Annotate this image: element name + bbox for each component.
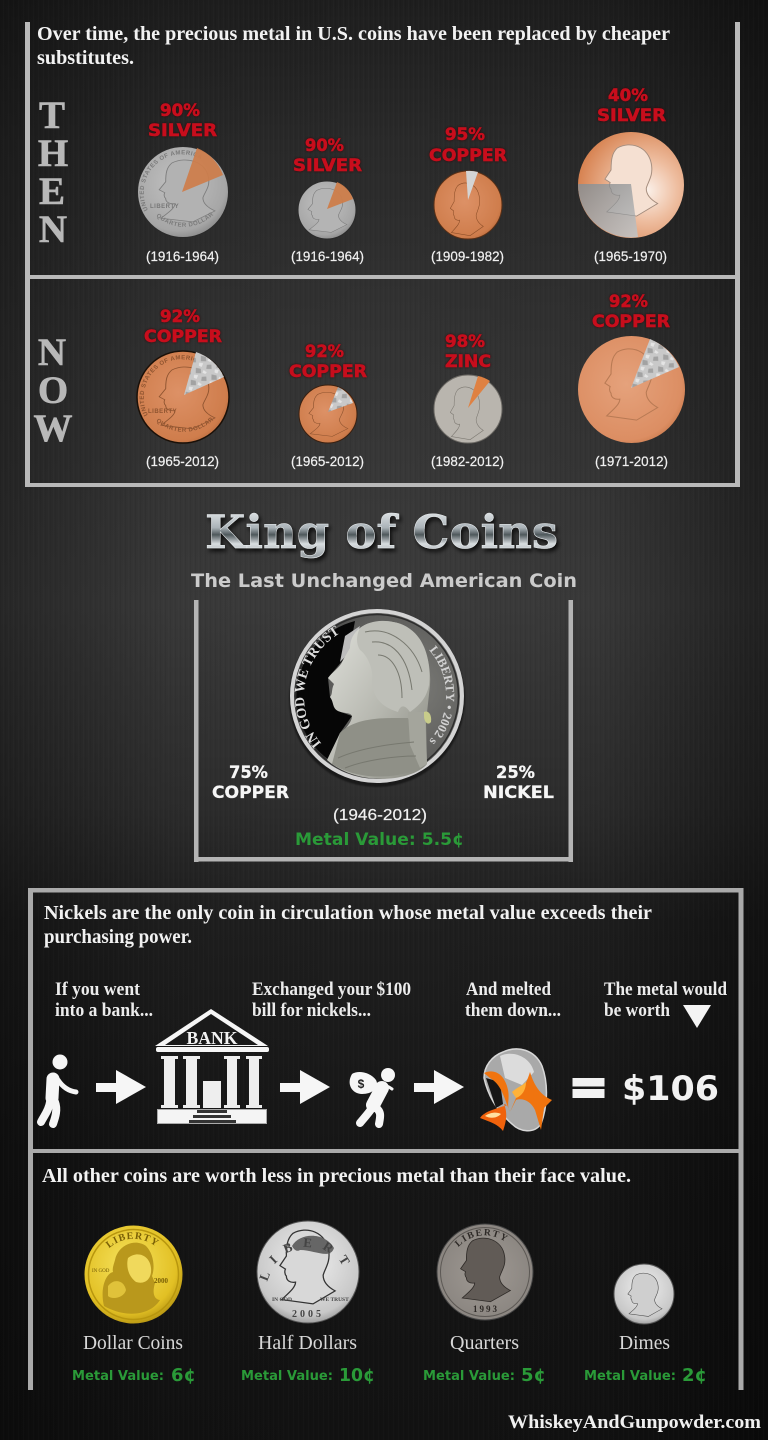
- coin: then half dollar 40% silver: (1965-1970): [594, 248, 667, 264]
- label: dollar coins: Dollar Coins: [83, 1333, 183, 1354]
- icon: walking person: [41, 1054, 76, 1124]
- coin: then half dollar 40% silver: 40%: [608, 86, 648, 106]
- metal value: nickel: Metal Value: 5.5¢: [295, 830, 464, 850]
- coin: now half dollar 92% copper: 92%: [609, 292, 648, 312]
- metal value: dollar: 6¢: [171, 1365, 196, 1386]
- coin: dollar: 2000: [154, 1277, 168, 1285]
- coin: now quarter 92% copper: 92%: [160, 307, 200, 327]
- metal value: half dollar: [241, 1365, 375, 1386]
- coin: half dollar: IN GOD: [272, 1297, 292, 1303]
- label: dimes: Dimes: [619, 1333, 670, 1354]
- label: NOW: N: [38, 331, 66, 374]
- metal value: quarter: 5¢: [521, 1365, 546, 1386]
- coin: then half dollar 40% silver: SILVER: [597, 106, 666, 126]
- step text: melt: And melted: [466, 980, 552, 1000]
- value: $106: $106: [622, 1069, 719, 1109]
- panel: melt value frame: [28, 888, 744, 1390]
- coin: then penny 95% copper: COPPER: [429, 146, 507, 166]
- coin: dime: [614, 1264, 674, 1324]
- coin: then penny 95% copper: 95%: [445, 125, 485, 145]
- coin: quarter: [436, 1224, 534, 1320]
- label: 75% copper: [212, 763, 289, 803]
- step text: bank: into a bank...: [55, 1001, 153, 1021]
- coin: then dime 90% silver: [291, 136, 364, 264]
- label: NOW: [34, 331, 72, 450]
- icon: equals sign: [572, 1078, 604, 1098]
- footer: source: WhiskeyAndGunpowder.com: [508, 1412, 761, 1433]
- coin: now dime 92% copper: 92%: [305, 342, 344, 362]
- metal value: dime: 2¢: [682, 1365, 707, 1386]
- coin: then dime 90% silver: SILVER: [293, 156, 362, 176]
- coin: dollar: LIBERTY: [105, 1232, 160, 1248]
- heading: precious metal statement: Over time, the precious metal in U.S. coins have been replaced by cheaper: [37, 24, 670, 45]
- step text: melt: them down...: [465, 1001, 561, 1021]
- coin: now quarter 92% copper: QUARTER DOLLAR: [157, 418, 214, 432]
- coin: then half dollar 40% silver: [578, 86, 684, 264]
- step text: bank: [55, 980, 153, 1021]
- coin: now quarter 92% copper: (1965-2012): [146, 453, 219, 469]
- icon: down triangle: [683, 1005, 711, 1028]
- label: THEN: E: [39, 170, 65, 213]
- coin: then quarter 90% silver: (1916-1964): [146, 248, 219, 264]
- coin: now penny 98% zinc: (1982-2012): [431, 453, 504, 469]
- step text: worth: The metal would: [604, 980, 728, 1000]
- coin: half dollar: [256, 1220, 360, 1324]
- label: 25% nickel: 25%: [496, 763, 535, 783]
- coin: then penny 95% copper: [429, 125, 507, 264]
- coin: now dime 92% copper: COPPER: [289, 362, 367, 382]
- years: nickel: (1946-2012): [333, 807, 427, 824]
- metal value: quarter: Metal Value:: [423, 1369, 515, 1384]
- coin: dollar: [84, 1226, 182, 1324]
- coin: now dime 92% copper: (1965-2012): [291, 453, 364, 469]
- heading: precious metal statement: substitutes.: [37, 48, 134, 69]
- coin: then dime 90% silver: (1916-1964): [291, 248, 364, 264]
- coin: then quarter 90% silver: SILVER: [148, 121, 217, 141]
- arrow 3: [414, 1070, 464, 1104]
- coin: now half dollar 92% copper: COPPER: [592, 312, 670, 332]
- coin: now quarter 92% copper: [136, 307, 230, 470]
- label: 75% copper: COPPER: [212, 783, 289, 803]
- label: NOW: O: [38, 369, 68, 412]
- icon: melting nickel with flames: [480, 1049, 552, 1131]
- label: quarters: Quarters: [450, 1333, 519, 1354]
- metal value: quarter: [423, 1365, 546, 1386]
- metal value: dollar: [72, 1365, 196, 1386]
- title: King of Coins: King of Coins: [205, 505, 558, 559]
- coin: then quarter 90% silver: [138, 101, 228, 264]
- label: 75% copper: 75%: [229, 763, 268, 783]
- step text: bank: If you went: [55, 980, 141, 1000]
- icon: man carrying money bag: [350, 1068, 395, 1124]
- heading: nickels statement: purchasing power.: [44, 927, 192, 948]
- coin: now penny 98% zinc: 98%: [445, 332, 485, 352]
- arrow 2: [280, 1070, 330, 1104]
- step text: exchange: bill for nickels...: [252, 1001, 371, 1021]
- coin: Jefferson nickel: IN GOD WE TRUST: [294, 625, 338, 749]
- icon: man carrying money bag: $: [358, 1077, 365, 1091]
- coin: quarter: 1993: [473, 1304, 499, 1314]
- coin: dollar: IN GOD: [92, 1269, 110, 1274]
- icon: bank: [155, 1009, 269, 1124]
- coin: now quarter 92% copper: UNITED STATES OF AMERICA: [140, 355, 194, 416]
- coin: then quarter 90% silver: QUARTER DOLLAR: [157, 212, 214, 227]
- label: 25% nickel: NICKEL: [483, 783, 554, 803]
- step text: melt: [465, 980, 561, 1021]
- label: THEN: [38, 94, 68, 251]
- coin: Jefferson nickel: LIBERTY • 2002 s: [429, 645, 454, 744]
- coin: half dollar: 2005: [292, 1309, 324, 1320]
- coin: then quarter 90% silver: LIBERTY: [150, 204, 179, 210]
- metal value: half dollar: Metal Value:: [241, 1369, 333, 1384]
- label: THEN: N: [39, 208, 67, 251]
- label: 25% nickel: [483, 763, 554, 803]
- coin: now half dollar 92% copper: (1971-2012): [595, 453, 668, 469]
- coin: now dime 92% copper: [289, 342, 367, 469]
- metal value: dime: [584, 1365, 707, 1386]
- label: NOW: W: [34, 407, 72, 450]
- step text: exchange: [252, 980, 411, 1021]
- panel: then and now frame: [25, 22, 740, 487]
- subtitle: The Last Unchanged American Coin: [191, 570, 577, 592]
- label: THEN: H: [38, 132, 68, 175]
- coin: then dime 90% silver: 90%: [305, 136, 344, 156]
- heading: nickels statement: Nickels are the only coin in circulation whose metal value exceeds their: [44, 903, 652, 924]
- metal value: dime: Metal Value:: [584, 1369, 676, 1384]
- icon: bank: BANK: [186, 1028, 238, 1048]
- arrow 1: [96, 1070, 146, 1104]
- coin: quarter: LIBERTY: [454, 1228, 508, 1247]
- step text: worth: [604, 980, 728, 1021]
- heading: precious metal statement: [37, 24, 670, 69]
- coin: Jefferson nickel: [288, 609, 466, 787]
- panel: nickel frame: [194, 600, 573, 862]
- coin: half dollar: WE TRUST: [320, 1297, 349, 1303]
- metal value: half dollar: 10¢: [339, 1365, 375, 1386]
- heading: nickels statement: [44, 903, 652, 948]
- coin: now penny 98% zinc: [431, 332, 504, 469]
- coin: then quarter 90% silver: UNITED STATES OF AMERICA: [140, 150, 196, 212]
- heading: other coins: All other coins are worth less in precious metal than their face value.: [42, 1166, 631, 1187]
- coin: now quarter 92% copper: LIBERTY: [148, 409, 177, 415]
- metal value: dollar: Metal Value:: [72, 1369, 164, 1384]
- label: half dollars: Half Dollars: [258, 1333, 357, 1354]
- coin: then quarter 90% silver: 90%: [160, 101, 200, 121]
- step text: exchange: Exchanged your $100: [252, 980, 411, 1000]
- coin: now half dollar 92% copper: [578, 292, 685, 469]
- step text: worth: be worth: [604, 1001, 671, 1021]
- coin: then penny 95% copper: (1909-1982): [431, 248, 504, 264]
- coin: now quarter 92% copper: COPPER: [144, 327, 222, 347]
- coin: now penny 98% zinc: ZINC: [445, 352, 491, 372]
- label: THEN: T: [39, 94, 65, 137]
